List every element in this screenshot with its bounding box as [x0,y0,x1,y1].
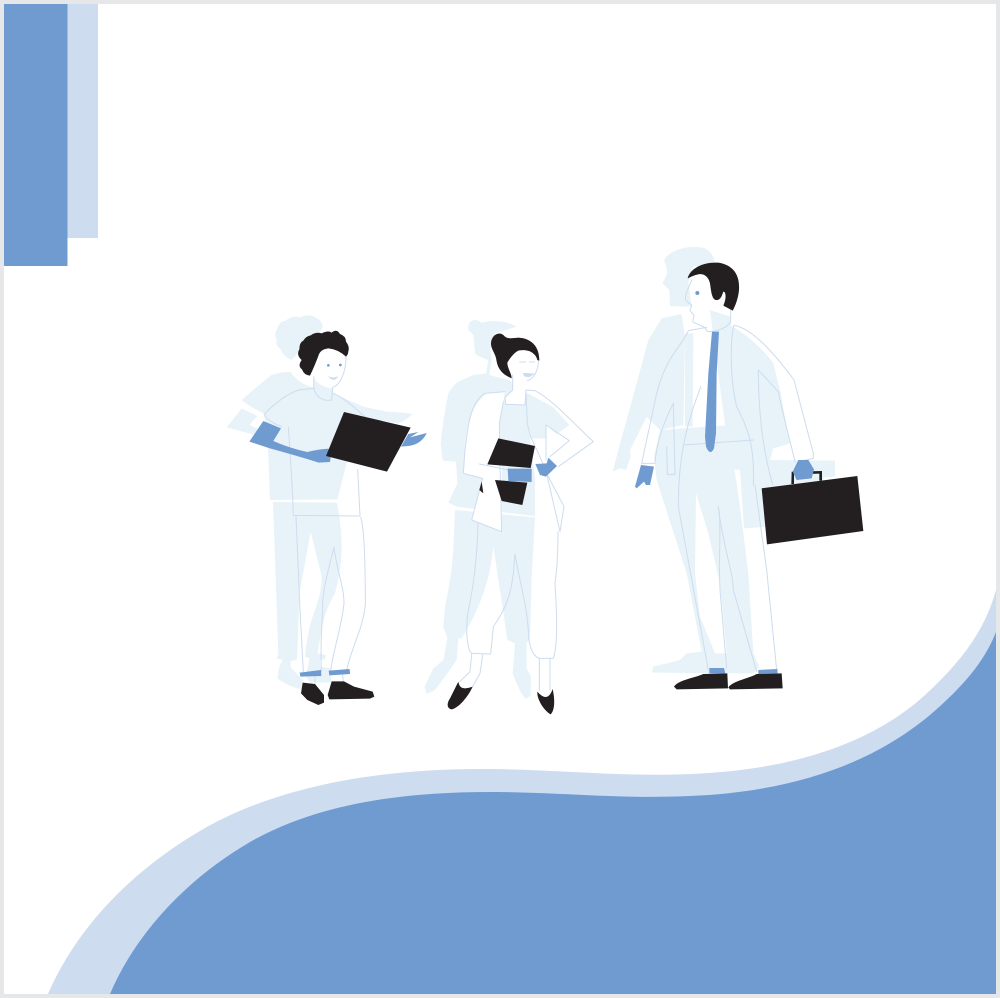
shadow figure 2 [425,320,569,699]
outline figure 1 [265,357,365,683]
tablet [326,412,411,472]
dark bottom wave [110,632,996,994]
person 3: man with briefcase [613,247,863,689]
blue arm [249,421,331,463]
face [505,350,539,405]
neck shadow [314,378,333,400]
right hand [401,432,427,447]
dark top-left accent bar [4,4,68,266]
shadow figure 3 [613,247,835,673]
hand on briefcase [793,460,814,480]
white triangle between arm and torso [535,425,569,477]
hand on folder [508,469,532,482]
white arm sleeve [535,391,593,467]
eye [695,291,699,295]
cuffs [300,670,321,677]
eyes and mouth [327,364,342,380]
shoes [301,683,324,705]
light bottom wave [48,590,996,994]
face [313,347,346,393]
shoes [448,682,473,709]
hair [688,263,739,311]
white coat panel [463,392,505,532]
shadow figure 1 [227,315,413,689]
hand on hip [535,458,557,477]
shoes [674,673,728,689]
face features [519,362,535,377]
white leg gap [695,493,727,653]
briefcase [762,471,863,544]
hair [298,331,349,376]
person 2: woman with folder [425,320,593,714]
outline figure 3 [642,280,813,672]
white coat right panel [527,423,564,532]
outline figure 2 [460,360,593,690]
left hand [635,465,654,488]
hair [491,333,539,378]
light top-left accent bar [67,4,98,238]
person 1: curly-haired man with tablet [227,315,427,705]
socks [709,668,778,674]
tie [705,332,719,452]
folder [479,438,535,505]
